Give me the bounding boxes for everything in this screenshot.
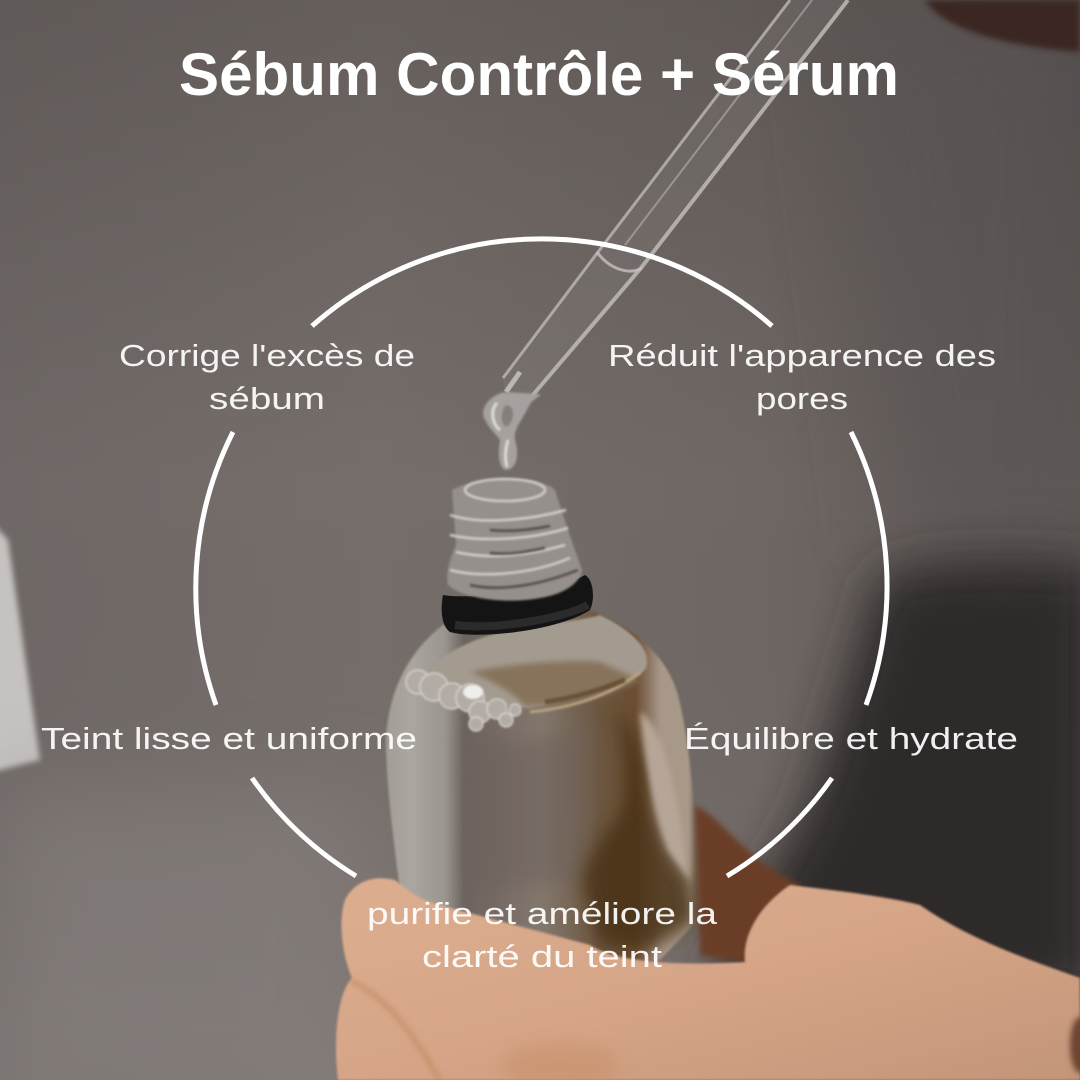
label: right: Équilibre et hydrate [684, 721, 1018, 756]
bubbles [406, 670, 521, 731]
photo: glass bottle [386, 479, 698, 960]
circular cycle ring made of five arcs [196, 239, 887, 876]
bottle neck with thread [447, 479, 582, 601]
bottle body [386, 610, 698, 960]
arc: right [851, 432, 887, 705]
photo: holding hand [336, 806, 1080, 1080]
title: Sébum Contrôle + Sérum [179, 41, 899, 108]
label: left: Teint lisse et uniforme [41, 721, 417, 756]
arc: lower left [252, 778, 356, 876]
label: top right [608, 338, 996, 416]
label: top left: Corrige l'excès de [119, 338, 415, 373]
label: bottom: clarté du teint [422, 939, 662, 974]
amber reflection [582, 710, 695, 950]
cycle labels [41, 338, 1018, 974]
arc: lower right [727, 778, 832, 876]
label: bottom: purifie et améliore la [367, 896, 718, 931]
photo: serum drop [483, 392, 540, 470]
label: top right: Réduit l'apparence des [608, 338, 996, 373]
arc: left [196, 432, 233, 705]
collar [442, 575, 593, 635]
photo: glass pipette [503, 0, 848, 396]
label: top right: pores [756, 381, 848, 416]
photo: hand top-right corner [925, 0, 1080, 52]
label: top left: sébum [209, 381, 325, 416]
bottle shoulder reflection [420, 615, 647, 708]
label: top left [119, 338, 415, 416]
arc: top [312, 239, 772, 326]
label: bottom [367, 896, 718, 974]
